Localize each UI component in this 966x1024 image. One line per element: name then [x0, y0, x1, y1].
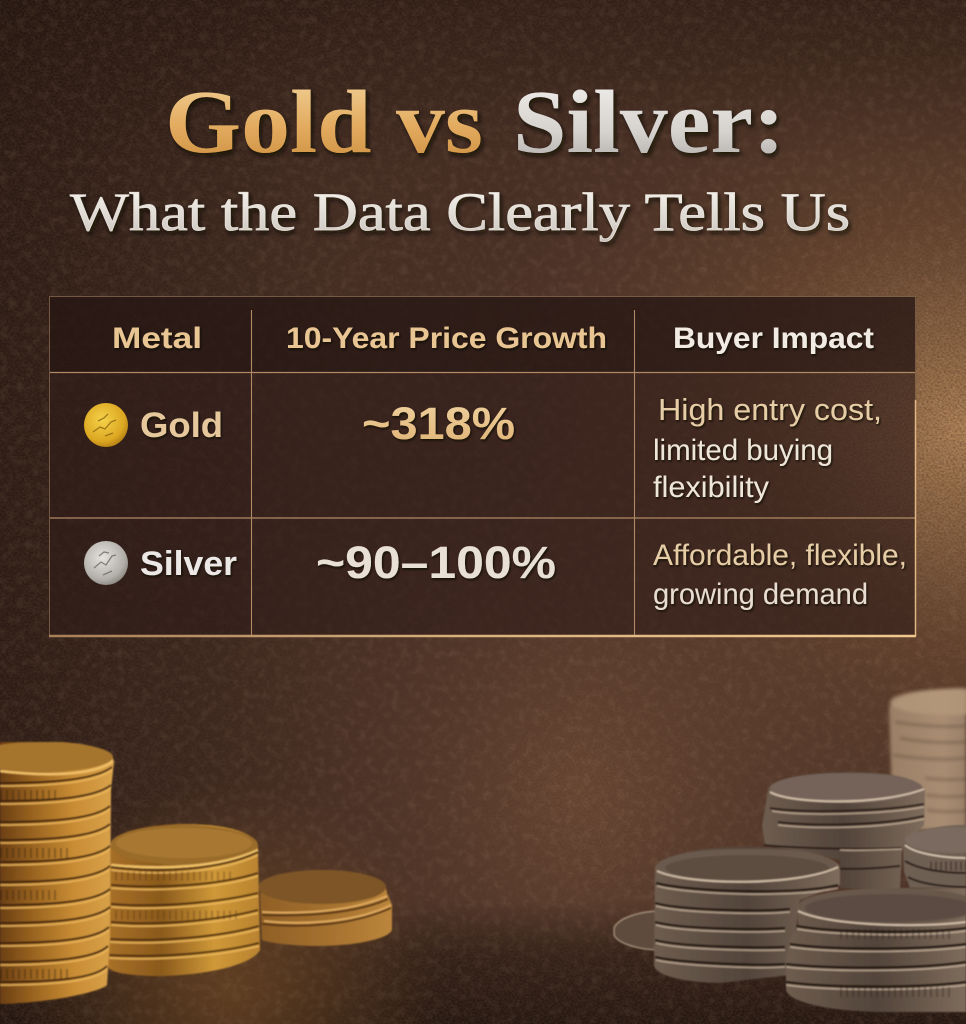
silver coin stack: back center: [762, 772, 925, 890]
gold buyer impact: High entry cost,: [658, 392, 882, 427]
title: silver: Silver:: [513, 73, 785, 172]
gold coin stack: tall, left: [0, 742, 114, 1004]
silver buyer impact: growing demand: [653, 578, 868, 611]
value: gold growth: ~318%: [362, 398, 515, 449]
value: silver growth: ~90–100%: [316, 537, 556, 588]
header: price growth: 10-Year Price Growth: [286, 322, 607, 355]
silver buyer impact: [653, 539, 907, 611]
gold coin stack: middle: [107, 824, 260, 976]
icon: silver coin: [84, 541, 128, 585]
silver coin stack: front left: [654, 847, 840, 983]
subtitle: What the Data Clearly Tells Us: [70, 182, 850, 242]
silver coin: lone flat coin: [614, 911, 660, 950]
gold buyer impact: flexibility: [653, 471, 769, 504]
table grid lines: [49, 296, 916, 636]
silver coin stack: far right, blurred: [889, 688, 966, 830]
table header band: [50, 297, 916, 372]
gold coin stack: short, right: [258, 870, 392, 946]
header: metal: Metal: [112, 322, 202, 355]
icon: gold coin: [84, 403, 128, 447]
header: buyer impact: Buyer Impact: [673, 322, 874, 355]
gold buyer impact: [653, 392, 882, 504]
title: gold vs: Gold vs: [165, 73, 483, 172]
silver coin stack: right middle: [903, 825, 966, 888]
row label: silver: Silver: [140, 545, 237, 583]
silver coin stack: front right: [786, 888, 966, 1012]
comparison table: [49, 296, 916, 636]
row label: gold: Gold: [140, 406, 223, 445]
table body panel: [49, 296, 916, 636]
silver buyer impact: Affordable, flexible,: [653, 539, 907, 572]
title: [165, 73, 785, 172]
gold buyer impact: limited buying: [653, 434, 833, 467]
